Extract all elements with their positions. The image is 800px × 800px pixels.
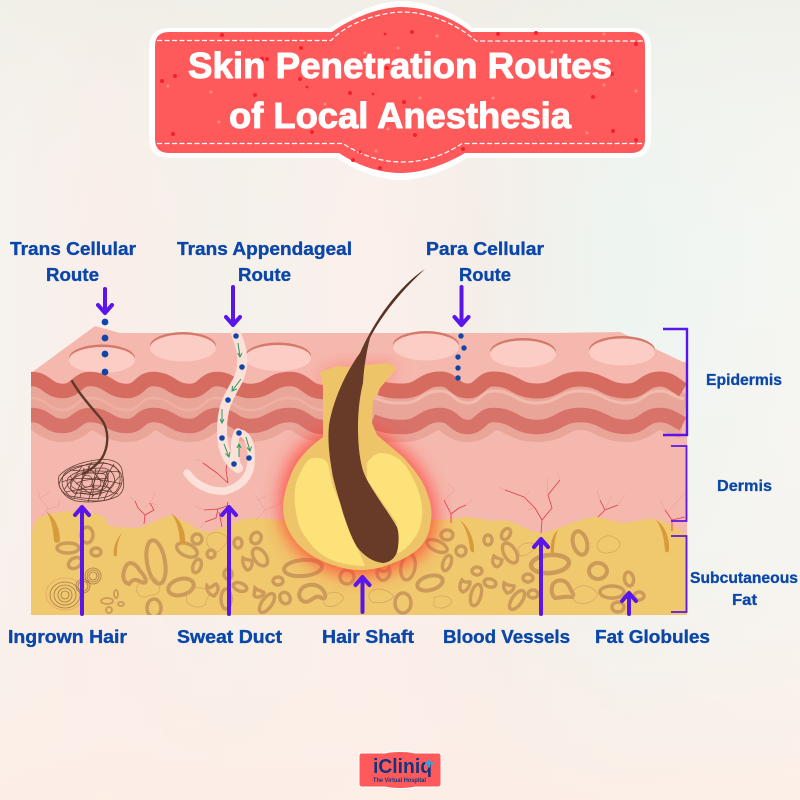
upper follicle glow [320,363,397,388]
layer labels [690,372,798,609]
title: Skin Penetration Routes [188,45,612,86]
logo tagline: The Virtual Hospital [373,778,426,784]
layer labels: Dermis [717,478,772,495]
heart shaped globules [123,563,146,584]
follicle glow [284,435,432,572]
ingrown hair stem [72,381,107,474]
skin cross-section [31,269,687,617]
layer labels: Epidermis [706,372,782,389]
arrow: sweat duct [222,507,236,614]
layer brackets [663,329,687,612]
layer labels: Subcutaneous [690,570,798,587]
ingrown hair [58,459,124,502]
bottom labels: Hair Shaft [322,627,414,647]
title [188,45,612,136]
arrow: trans appendageal [226,287,240,325]
hair shaft [328,269,425,563]
route labels: Para Cellular [426,239,544,259]
subcutaneous fat layer [31,511,687,615]
bracket: epidermis [663,329,687,435]
bottom labels [8,627,710,647]
arrow: ingrown hair [75,507,89,614]
logo wordmark: iCliniq [373,756,432,778]
sebaceous gland left lobe [295,458,365,566]
route labels: Trans Cellular [10,239,136,259]
route labels [10,239,544,285]
pores on skin surface [69,331,655,373]
skin block base [31,326,687,615]
sweat duct [187,334,251,491]
thin fat cell outlines and small globules [137,532,620,608]
fat streaks [46,511,669,556]
route labels: Route [459,265,511,285]
duct flow arrows [220,343,252,457]
title banner [149,1,651,180]
title: of Local Anesthesia [229,95,572,136]
logo badge [359,752,441,788]
fat concentric cells [46,568,101,610]
layer labels: Fat [732,592,758,609]
bracket: subcutaneous fat [671,536,686,612]
bottom labels: Blood Vessels [443,627,570,647]
banner red fill [155,7,645,173]
arrow: hair shaft [356,577,370,612]
logo [359,752,441,788]
route labels: Route [238,265,291,285]
bottom labels: Fat Globules [595,627,710,647]
route labels: Route [46,265,99,285]
route labels: Trans Appendageal [177,239,352,259]
sebaceous gland right lobe [367,453,422,553]
arrow: trans cellular [98,289,112,313]
arrows [75,287,636,614]
bottom labels: Ingrown Hair [8,627,127,647]
route dots: trans appendageal [219,333,252,467]
arrow: para cellular [454,287,468,325]
logo plus [425,760,433,768]
wavy epidermis layers [31,379,684,427]
arrow: fat globules [622,593,636,614]
fat globules [57,527,644,617]
route dots: trans cellular [102,319,108,375]
arrow: blood vessels [534,539,548,614]
hair follicle [283,363,432,570]
bottom labels: Sweat Duct [177,627,282,647]
banner white outline [149,1,651,180]
bracket: dermis [671,446,686,521]
banner stitched line [157,12,643,162]
blood vessels [135,458,685,533]
route dots: para cellular [455,333,467,381]
banner speckles [160,30,638,170]
